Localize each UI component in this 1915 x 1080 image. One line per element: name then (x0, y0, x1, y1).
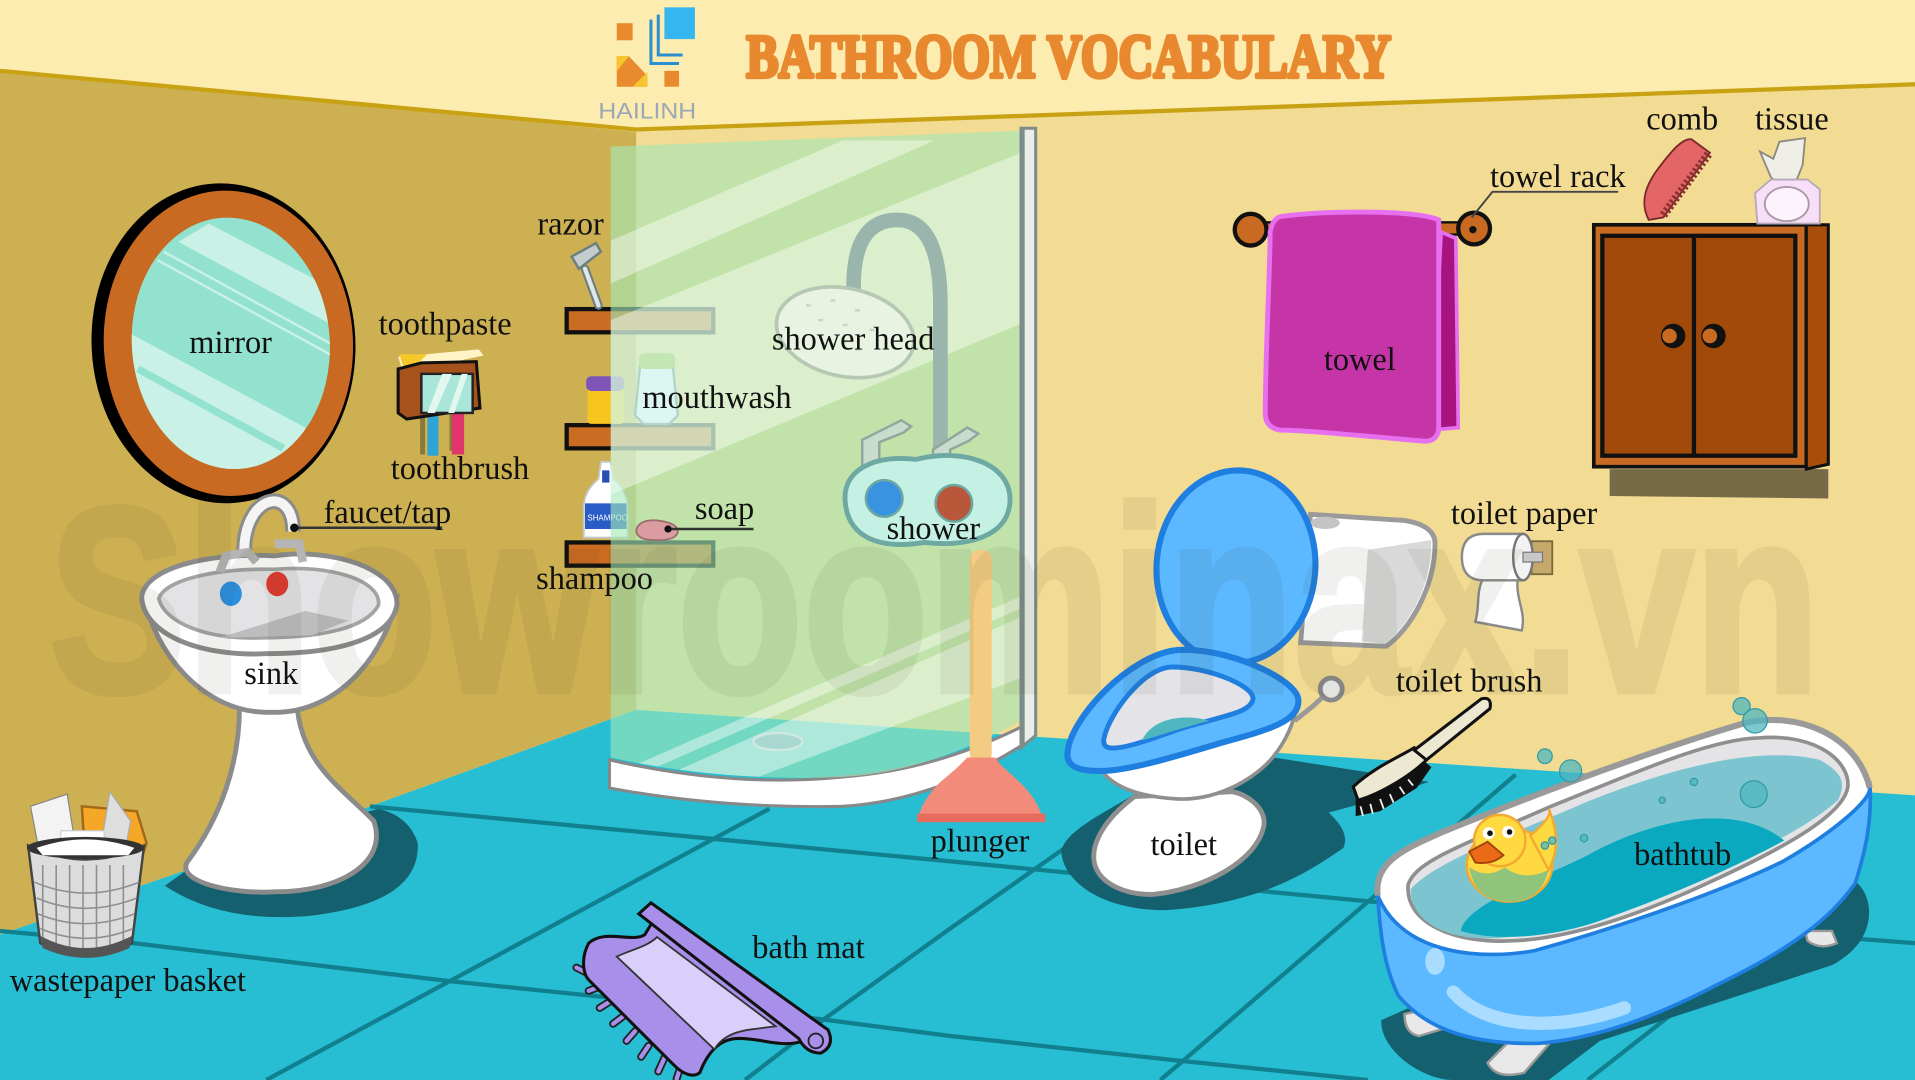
label: bathtub: bathtub (1634, 837, 1731, 873)
shower head (768, 275, 922, 390)
shelf 3 (567, 542, 713, 566)
toilet brush (1353, 698, 1490, 816)
bathtub (1377, 720, 1870, 1043)
label: towel rack: towel rack (1490, 159, 1626, 195)
shower tray (609, 721, 1033, 807)
toothpaste and holder (398, 349, 484, 419)
faucet pointer line (290, 524, 442, 532)
rubber duck (1467, 809, 1556, 902)
logo (598, 7, 696, 124)
jar (586, 376, 624, 424)
label: shower: shower (887, 511, 980, 547)
shower pipe (854, 220, 940, 452)
label: toilet brush: toilet brush (1396, 663, 1542, 699)
toilet lid (1150, 465, 1322, 669)
ceiling line (0, 71, 1915, 130)
shelf 2 (567, 425, 713, 448)
mirror (83, 177, 364, 510)
wastepaper basket (27, 792, 147, 958)
toilet shadow (1061, 755, 1429, 910)
soap pointer line (664, 525, 754, 533)
label: wastepaper basket: wastepaper basket (10, 963, 246, 999)
logo wordmark: HAILINH (598, 99, 696, 124)
bathtub feet (1404, 931, 1837, 1075)
label: plunger: plunger (931, 824, 1030, 860)
label: shampoo: shampoo (536, 561, 653, 597)
right knob (1701, 324, 1726, 348)
cabinet shadow (1610, 469, 1828, 498)
razor (572, 243, 601, 305)
shelf 1 (567, 309, 713, 332)
label: mouthwash: mouthwash (642, 380, 792, 416)
label: toothbrush: toothbrush (391, 451, 529, 487)
label: toothpaste: toothpaste (379, 307, 512, 343)
tiled floor (0, 710, 1915, 1080)
back wall (636, 83, 1915, 795)
label: toilet: toilet (1150, 827, 1217, 863)
toilet paper (1462, 534, 1552, 630)
cabinet (1594, 225, 1828, 469)
shower controls (845, 420, 1010, 544)
label: towel: towel (1324, 342, 1396, 378)
soap (636, 520, 678, 540)
label: toilet paper: toilet paper (1451, 496, 1598, 532)
shampoo bottle (584, 462, 628, 538)
sink (142, 501, 397, 892)
soap bubbles (1538, 698, 1767, 849)
label: sink: sink (244, 656, 299, 692)
left wall (0, 71, 636, 935)
label: razor: razor (537, 207, 604, 243)
toilet seat (1067, 650, 1298, 771)
plunger (917, 550, 1045, 822)
label: bath mat: bath mat (752, 930, 865, 966)
left knob (1661, 324, 1685, 348)
label: comb: comb (1646, 101, 1718, 138)
tissue box (1755, 138, 1820, 224)
bathtub shadow (1381, 882, 1869, 1080)
label: tissue: tissue (1755, 101, 1829, 138)
toilet tank (1301, 514, 1435, 646)
towel (1265, 212, 1458, 441)
glass enclosure (611, 131, 1021, 782)
towel rack pointer (1472, 192, 1618, 217)
label: shower head: shower head (772, 321, 934, 357)
ceiling (0, 0, 1915, 132)
towel rack (1235, 213, 1490, 246)
toothbrushes (420, 409, 464, 456)
shampoo bottle: SHAMPOO (587, 513, 628, 522)
label: soap: soap (695, 491, 754, 527)
title: BATHROOM VOCABULARY (746, 23, 1391, 90)
shower frame (1020, 128, 1036, 748)
mouthwash bottle (635, 353, 678, 424)
bath mat (576, 903, 830, 1079)
toilet bowl and base (1094, 702, 1297, 894)
label: faucet/tap: faucet/tap (324, 495, 451, 531)
comb (1644, 139, 1710, 220)
label: mirror: mirror (189, 325, 272, 361)
sink shadow (165, 809, 418, 917)
flush handle (1295, 678, 1342, 721)
